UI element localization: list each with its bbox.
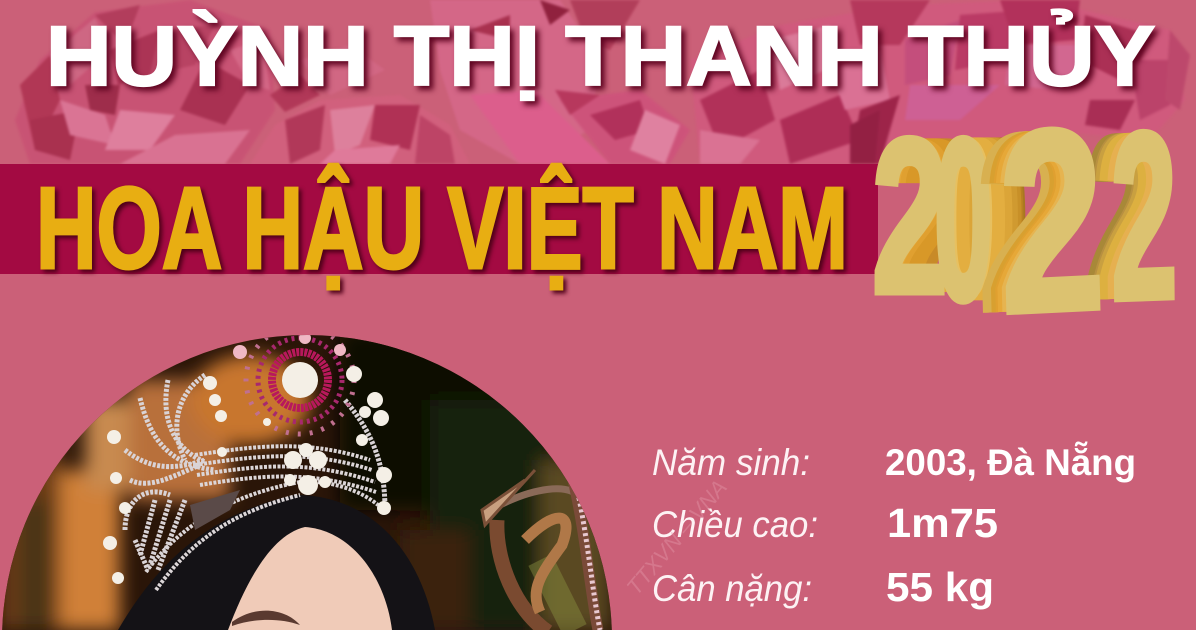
diamond centre: [250, 45, 470, 164]
info labels: [652, 441, 1136, 610]
weight value: 55 kg: [886, 564, 994, 610]
diamond upper middle: [430, 0, 690, 164]
hair: [118, 495, 435, 630]
height value: 1m75: [887, 500, 998, 546]
profile info: [652, 441, 1136, 610]
crown sunburst: [246, 326, 354, 434]
year 2022 in gold 3D numerals: 0: [934, 91, 993, 348]
year 2022 in gold 3D numerals: 2: [872, 93, 948, 339]
diamond left: [15, 0, 275, 164]
name heading: HUỲNH THỊ THANH THỦY: [46, 9, 1155, 103]
title band: [0, 164, 878, 274]
watermark: TTXVN – VNA: [622, 475, 732, 600]
gold heading: HOA HẬU VIỆT NAM: [36, 163, 848, 293]
crown wing strokes: [125, 375, 385, 570]
blurred stage background: [0, 330, 620, 630]
eyebrow: [232, 611, 300, 626]
face: [228, 527, 392, 630]
scepter: [482, 470, 600, 630]
crown band: [146, 446, 378, 590]
diamond background: [16, 0, 1190, 164]
main title and subtitle: [36, 8, 1162, 296]
year 2022 in gold 3D numerals: 2: [997, 75, 1107, 367]
birth label: Năm sinh:: [652, 442, 810, 483]
diamond right: [690, 0, 1190, 164]
weight label: Cân nặng:: [652, 568, 812, 609]
year 2022 in gold 3D numerals: 2: [1110, 83, 1178, 350]
crown: [103, 326, 392, 590]
portrait photo in circle: [2, 335, 612, 630]
height label: Chiều cao:: [652, 504, 818, 545]
crown pearls: [103, 332, 392, 584]
year 2022 in gold 3D numerals: [872, 75, 1178, 367]
birth value: 2003, Đà Nẵng: [885, 441, 1136, 483]
